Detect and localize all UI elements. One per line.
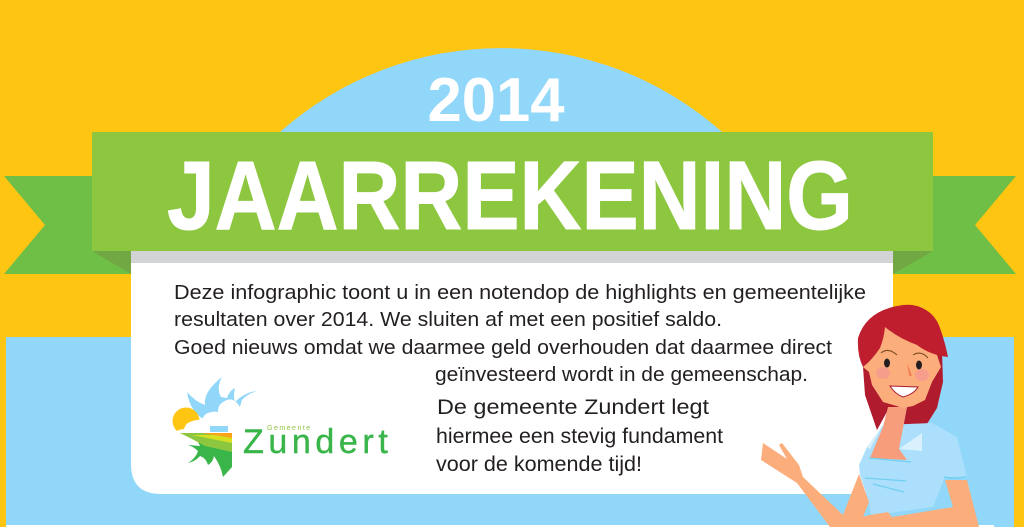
closing text block: De gemeente Zundert legt (437, 396, 709, 419)
ribbon: right tail (893, 176, 1016, 274)
logo wordmark small: Gemeente (267, 425, 312, 432)
woman: raised arm and hand (761, 443, 869, 527)
ribbon: left tail (4, 176, 131, 274)
logo icon: white cloud (175, 399, 242, 435)
woman: cheeks (876, 367, 929, 381)
intro text block: Goed nieuws omdat we daarmee geld overhouden dat daarmee direct (174, 337, 832, 359)
logo: Gemeente Zundert (172, 377, 392, 477)
ribbon: left fold (92, 251, 131, 274)
woman: collar (867, 425, 922, 451)
logo wordmark large: Zundert (243, 423, 392, 461)
year heading: 2014 (428, 66, 565, 135)
logo icon: blue sky patch (210, 426, 228, 432)
woman: front hair (858, 305, 948, 367)
intro text block: geïnvesteerd wordt in de gemeenschap. (435, 364, 808, 386)
woman: blouse (859, 423, 967, 516)
background: blue lower panel (6, 337, 1014, 527)
intro text block (174, 282, 866, 386)
closing text block: voor de komende tijd! (436, 453, 642, 476)
intro text block: Deze infographic toont u in een notendop de highlights en gemeentelijke (174, 282, 866, 304)
woman: eyebrows (881, 350, 928, 358)
intro text block: resultaten over 2014. We sluiten af met een positief saldo. (174, 309, 722, 331)
woman: face (863, 327, 941, 408)
woman: back hair (863, 352, 943, 449)
content card (131, 251, 893, 494)
woman: near arm (856, 480, 979, 527)
logo icon: sun (172, 408, 200, 434)
ribbon: main green banner (92, 132, 933, 251)
background: blue semicircle (280, 48, 722, 132)
logo icon: field bands (180, 433, 232, 452)
main heading: JAARREKENING (167, 141, 853, 250)
closing text block: hiermee een stevig fundament (436, 425, 723, 448)
logo icon: green leaves (188, 436, 232, 477)
woman: eyes (884, 358, 922, 370)
woman: neck (870, 407, 907, 460)
logo icon: blue leaves (187, 377, 257, 420)
woman: smile (890, 386, 918, 397)
closing text block (436, 396, 723, 476)
woman: blouse details (865, 458, 966, 492)
ribbon: right fold (893, 251, 933, 274)
woman: nose (907, 363, 912, 376)
character: woman (761, 305, 979, 527)
